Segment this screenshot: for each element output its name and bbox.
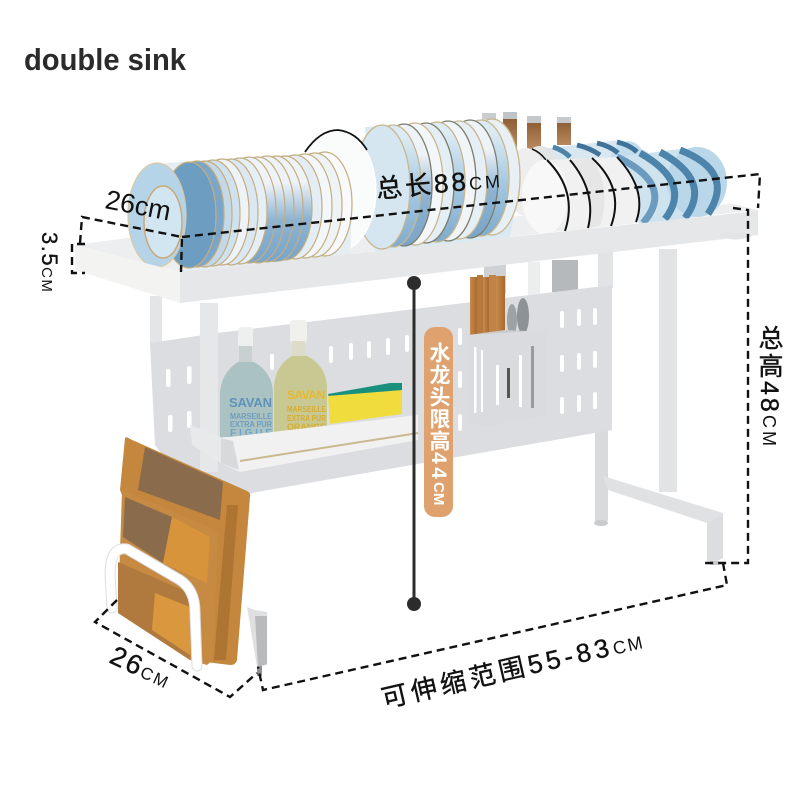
label: lip height: 3.5 CM xyxy=(37,232,62,293)
bowls front row: blue xyxy=(617,147,727,225)
knife handles xyxy=(482,112,571,149)
label: extension range: 可伸缩范围55-83CM xyxy=(379,624,647,714)
front plate face xyxy=(128,163,186,267)
shelf front faces xyxy=(75,210,758,303)
bottle: left: FIGUE xyxy=(230,428,272,439)
cutlery holder xyxy=(467,330,547,427)
bottle: left xyxy=(220,327,273,439)
cutting boards xyxy=(110,437,267,676)
bottle: left: SAVAN xyxy=(229,395,272,410)
label: base depth: 26CM xyxy=(105,640,177,695)
label: shelf depth: 26cm xyxy=(103,184,173,226)
plate stack: small plates xyxy=(128,152,352,278)
board: front xyxy=(118,562,190,660)
knives behind rack xyxy=(484,260,578,296)
faucet height pill: 水龙头限高 44 CM xyxy=(427,342,450,506)
faucet height pill xyxy=(424,327,453,517)
bottle: right: EXTRA PUR xyxy=(287,414,326,423)
panel slots xyxy=(166,308,597,432)
bottle: right: ORANGE xyxy=(287,422,326,432)
bowls front row: white xyxy=(522,157,639,234)
dimension lines xyxy=(72,174,760,697)
side bracket xyxy=(247,607,267,676)
bottle: right xyxy=(274,320,327,435)
tray bracket xyxy=(190,425,221,463)
label: total length: 总长88CM xyxy=(375,163,504,204)
bottle: left: MARSEILLE xyxy=(230,412,273,421)
plate stack: large plates xyxy=(296,119,520,252)
bowls back row xyxy=(506,140,648,216)
sponge xyxy=(328,383,402,424)
board: middle xyxy=(118,490,218,665)
faucet height pole xyxy=(407,276,421,611)
tray front xyxy=(221,415,418,472)
title: double sink xyxy=(24,42,187,77)
label: total height: 总高48 CM xyxy=(755,325,783,449)
bottle: right: MARSEILLE xyxy=(287,405,327,414)
shelf top surface xyxy=(75,204,758,272)
bottle: left: EXTRA PUR xyxy=(230,420,272,429)
bottle: right: SAVAN xyxy=(287,388,325,402)
pegboard panel xyxy=(150,285,612,505)
board: back xyxy=(120,437,250,665)
rear legs and posts xyxy=(150,252,613,526)
front legs and stretcher xyxy=(200,249,723,565)
chopsticks and cutlery xyxy=(470,275,529,337)
white holder xyxy=(110,549,197,666)
